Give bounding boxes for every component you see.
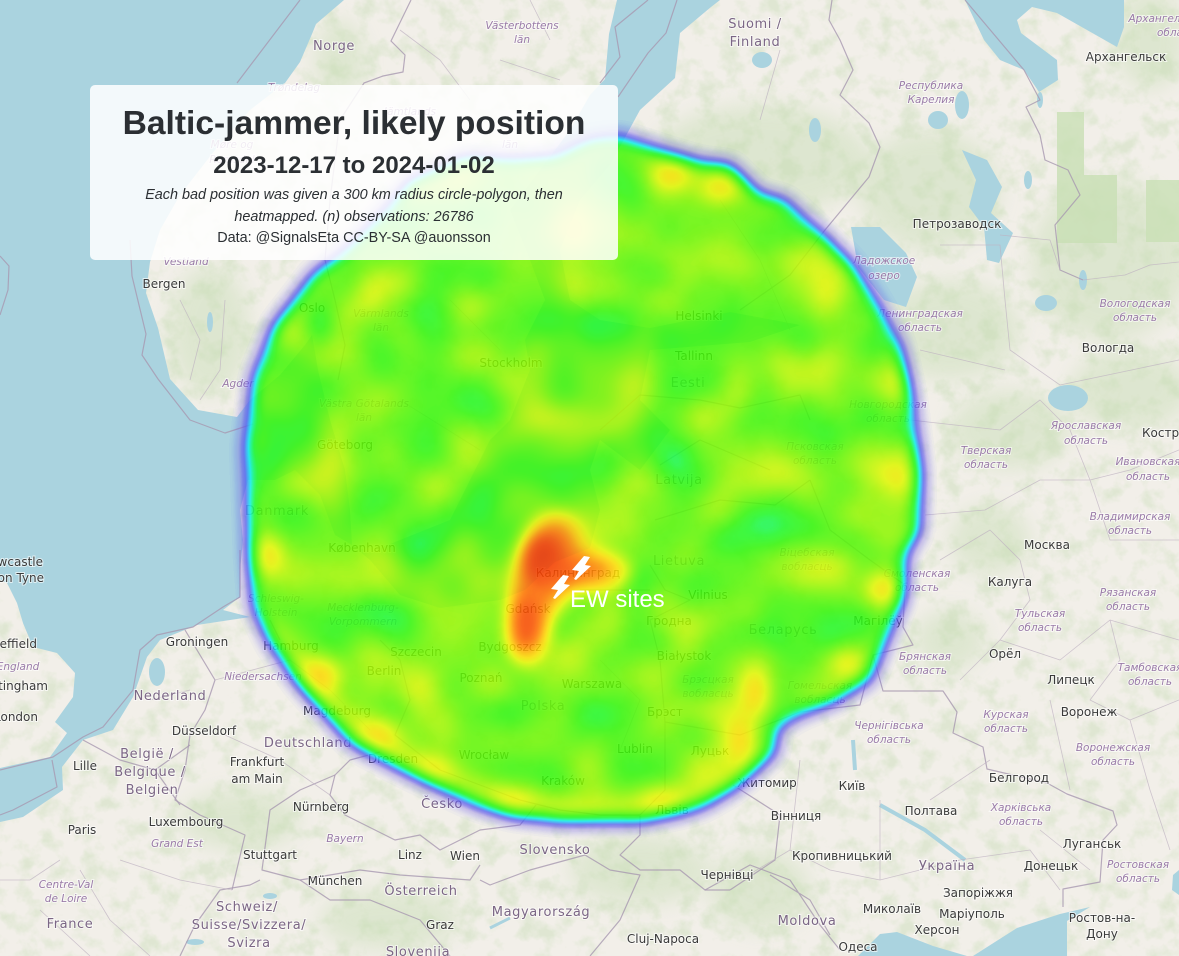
- place labels: countries: France: [47, 917, 93, 932]
- place labels: cities: Архангельск: [1086, 50, 1166, 64]
- place labels: regions: Ивановская: [1116, 456, 1179, 468]
- place labels: regions: Niedersachsen: [224, 671, 302, 683]
- method note: [145, 187, 563, 225]
- title panel: [90, 85, 618, 260]
- place labels: cities: Орёл: [989, 647, 1021, 661]
- place labels: regions: Ленинградская: [876, 308, 963, 320]
- managed forest blocks: [1057, 112, 1179, 243]
- place labels: countries: Moldova: [778, 914, 836, 929]
- lakes: [149, 52, 1088, 945]
- place labels: countries: Česko: [421, 796, 463, 812]
- patchy noise texture: [240, 134, 926, 828]
- place labels: regions: область: [1128, 676, 1172, 688]
- sea: White Sea: [965, 0, 1124, 92]
- place labels: regions: Новгородская: [849, 399, 927, 411]
- place labels: cities: Wrocław: [459, 748, 509, 762]
- place labels: regions: Вологодская: [1100, 298, 1170, 310]
- place labels: cities: Bergen: [143, 277, 185, 291]
- place labels: regions: Trøndelag: [268, 82, 320, 94]
- place labels: cities: Маріуполь: [939, 907, 1005, 921]
- place labels: cities: Чернівці: [701, 868, 753, 882]
- place labels: cities: Дону: [1086, 927, 1118, 941]
- place labels: regions: Гомельская: [788, 680, 852, 692]
- place labels: regions: Ростовская: [1107, 859, 1169, 871]
- place labels: cities: Linz: [398, 848, 422, 862]
- place labels: regions: Ладожское: [852, 255, 915, 267]
- EW sites label: EW sites: [570, 586, 665, 613]
- place labels: countries: Magyarország: [492, 905, 590, 920]
- place labels: cities: Миколаїв: [863, 902, 921, 916]
- place labels: cities: Tallinn: [674, 349, 713, 363]
- place labels: cities: Луганськ: [1063, 837, 1121, 851]
- place labels: regions: Vorpommern: [329, 616, 397, 628]
- place labels: regions: Holstein: [255, 607, 297, 619]
- place labels: countries: Nederland: [134, 689, 206, 704]
- place labels: cities: Dresden: [368, 752, 418, 766]
- place labels: cities: Кропивницький: [792, 849, 892, 863]
- place labels: countries: Belgique /: [114, 765, 186, 780]
- place labels: cities: Львів: [655, 803, 689, 817]
- place labels: regions: Віцебская: [779, 547, 835, 559]
- place labels: cities: Paris: [68, 823, 96, 837]
- place labels: regions: Брэсцкая: [682, 674, 734, 686]
- data credit: Data: @SignalsEta CC-BY-SA @auonsson: [217, 230, 491, 246]
- place labels: regions: Республика: [899, 80, 963, 92]
- place labels: regions: область: [867, 734, 911, 746]
- place labels: regions: Ярославская: [1050, 420, 1121, 432]
- place labels: countries: België /: [120, 747, 174, 762]
- place labels: countries: Svizra: [227, 936, 271, 951]
- place labels: regions: Псковская: [786, 441, 844, 453]
- place labels: regions: область: [898, 322, 942, 334]
- place labels: regions: Тверская: [961, 445, 1011, 457]
- place labels: countries: Danmark: [245, 504, 309, 519]
- place labels: regions: län: [356, 412, 372, 424]
- place labels: cities: Воронеж: [1061, 705, 1117, 719]
- place labels: cities: Göteborg: [317, 438, 373, 452]
- place labels: regions: область: [964, 459, 1008, 471]
- place labels: cities: am Main: [231, 772, 283, 786]
- place labels: regions: Agder: [221, 378, 254, 390]
- place labels: cities: Lille: [73, 759, 97, 773]
- place labels: countries: Suomi /: [728, 17, 782, 32]
- place labels: cities: Гродна: [646, 614, 692, 628]
- place labels: regions: вобласць: [781, 561, 833, 573]
- sea: Black Sea and Azov: [858, 870, 1179, 956]
- place labels: regions: Värmlands: [353, 308, 409, 320]
- place labels: cities: Одеса: [838, 940, 878, 954]
- place labels: cities: Gdańsk: [505, 602, 551, 616]
- place labels: cities: Брэст: [647, 705, 683, 719]
- place labels: cities: København: [328, 541, 396, 555]
- place labels: regions: область: [895, 582, 939, 594]
- place labels: cities: Петрозаводск: [913, 217, 1001, 231]
- place labels: regions: Schleswig-: [248, 593, 304, 605]
- place labels: cities: Magdeburg: [303, 704, 371, 718]
- place labels: regions: озеро: [868, 270, 900, 282]
- place labels: cities: Cluj-Napoca: [627, 932, 699, 946]
- place labels: regions: Рязанская: [1100, 587, 1156, 599]
- date range: 2023-12-17 to 2024-01-02: [213, 152, 495, 179]
- place labels: regions: Воронежская: [1076, 742, 1150, 754]
- place labels: regions: область: [1091, 756, 1135, 768]
- place labels: regions: Västra Götalands: [319, 398, 409, 410]
- place labels: cities: Bydgoszcz: [478, 640, 542, 654]
- place labels: regions: Курская: [983, 709, 1029, 721]
- place labels: regions: область: [1106, 601, 1150, 613]
- place labels: cities: Вінниця: [771, 809, 821, 823]
- place labels: countries: Slovensko: [520, 843, 590, 858]
- place labels: regions: Romsdal: [209, 154, 255, 166]
- place labels: countries: Schweiz/: [216, 900, 278, 915]
- sea: Baltic: [352, 0, 800, 608]
- place labels: regions: Grand Est: [151, 838, 204, 850]
- place labels: regions: län: [514, 34, 530, 46]
- place labels: cities: Калуга: [988, 575, 1032, 589]
- place labels: countries: Deutschland: [264, 736, 352, 751]
- place labels: cities: Graz: [426, 918, 454, 932]
- place labels: cities: Запоріжжя: [943, 886, 1013, 900]
- place labels: countries: Polska: [521, 699, 565, 714]
- place labels: cities: Stockholm: [479, 356, 543, 370]
- place labels: countries: Eesti: [671, 376, 705, 391]
- place labels: regions: Vestland: [163, 256, 209, 268]
- place labels: countries: Suisse/Svizzera/: [192, 918, 306, 933]
- place labels: regions: область: [866, 413, 910, 425]
- icon: EW site lightning bolt south: [551, 575, 570, 599]
- place labels: regions: Centre-Val: [39, 879, 93, 891]
- place labels: cities: Warszawa: [562, 677, 622, 691]
- place labels: cities: Київ: [839, 779, 865, 793]
- place labels: cities: Калининград: [536, 566, 620, 580]
- place labels: cities: München: [308, 874, 362, 888]
- place labels: cities: Донецьк: [1024, 859, 1078, 873]
- place labels: cities: Москва: [1024, 538, 1070, 552]
- place labels: regions: Карелия: [908, 94, 954, 106]
- place labels: regions: область: [984, 723, 1028, 735]
- place labels: regions: Bayern: [326, 833, 364, 845]
- place labels: cities: Vilnius: [688, 588, 728, 602]
- place labels: regions: Mecklenburg-: [327, 602, 399, 614]
- place labels: cities: Szczecin: [390, 645, 442, 659]
- place labels: cities: Житомир: [737, 776, 797, 790]
- place labels: regions: Смоленская: [884, 568, 950, 580]
- place labels: regions: län: [373, 322, 389, 334]
- place labels: countries: [47, 17, 975, 956]
- place labels: cities: Oslo: [299, 301, 325, 315]
- place labels: regions: область: [1064, 435, 1108, 447]
- place labels: cities: Липецк: [1047, 673, 1095, 687]
- place labels: regions: вобласць: [794, 694, 846, 706]
- sea: North Sea and Atlantic: [0, 0, 352, 822]
- place labels: countries: Belgien: [126, 783, 178, 798]
- place labels: cities: Hamburg: [263, 639, 319, 653]
- place labels: countries: Latvija: [655, 473, 703, 488]
- method note: Each bad position was given a 300 km radius circle-polygon, then: [145, 187, 563, 203]
- place labels: cities: Wien: [450, 849, 480, 863]
- place labels: regions: область: [1108, 525, 1152, 537]
- place labels: regions: вобласць: [682, 688, 734, 700]
- place labels: cities: Вологда: [1082, 341, 1134, 355]
- place labels: cities: Nürnberg: [293, 800, 349, 814]
- place labels: regions: län: [502, 139, 518, 151]
- place labels: cities: Stuttgart: [243, 848, 297, 862]
- place labels: countries: Norge: [313, 39, 355, 54]
- place labels: cities: Lublin: [617, 742, 653, 756]
- place labels: cities: Полтава: [905, 804, 957, 818]
- title: Baltic-jammer, likely position: [123, 105, 585, 142]
- place labels: countries: Finland: [730, 35, 780, 50]
- place labels: cities: Helsinki: [675, 309, 723, 323]
- place labels: regions: область: [1113, 312, 1157, 324]
- place labels: regions: Тульская: [1015, 608, 1065, 620]
- place labels: cities: Groningen: [166, 635, 228, 649]
- place labels: regions: Västerbottens: [485, 20, 559, 32]
- place labels: regions: область: [903, 665, 947, 677]
- icon: EW site lightning bolt north: [572, 556, 591, 580]
- place labels: regions: область: [793, 455, 837, 467]
- place labels: regions: Харківська: [990, 802, 1051, 814]
- place labels: regions: Jämtlands: [382, 106, 437, 118]
- place labels: countries: Україна: [919, 859, 975, 874]
- place labels: regions: область: [999, 816, 1043, 828]
- place labels: regions: Владимирская: [1090, 511, 1170, 523]
- place labels: cities: Херсон: [914, 923, 960, 937]
- place labels: cities: Berlin: [367, 664, 401, 678]
- place labels: countries: Lietuva: [653, 554, 705, 569]
- place labels: cities: Kraków: [541, 774, 585, 788]
- place labels: regions: область: [1126, 471, 1170, 483]
- place labels: countries: Беларусь: [749, 623, 817, 638]
- place labels: cities: Luxembourg: [149, 815, 223, 829]
- place labels: regions: Møre og: [211, 139, 254, 151]
- heatmap: likely jammer position: [231, 122, 936, 836]
- place labels: regions: область: [1116, 873, 1160, 885]
- place labels: cities: Białystok: [657, 649, 711, 663]
- place labels: cities: Белгород: [989, 771, 1049, 785]
- place labels: regions: область: [1018, 622, 1062, 634]
- place labels: cities: Ростов-на-: [1069, 911, 1135, 925]
- place labels: countries: Österreich: [384, 882, 458, 899]
- place labels: regions: Чернігівська: [854, 720, 924, 732]
- place labels: regions: de Loire: [45, 893, 87, 905]
- place labels: cities: Frankfurt: [230, 755, 284, 769]
- place labels: cities: Магілёў: [853, 614, 903, 628]
- place labels: cities: Луцьк: [691, 744, 729, 758]
- method note: heatmapped. (n) observations: 26786: [234, 209, 474, 225]
- place labels: cities: Poznań: [459, 671, 503, 685]
- place labels: regions: Брянская: [899, 651, 951, 663]
- place labels: cities: Düsseldorf: [172, 724, 237, 738]
